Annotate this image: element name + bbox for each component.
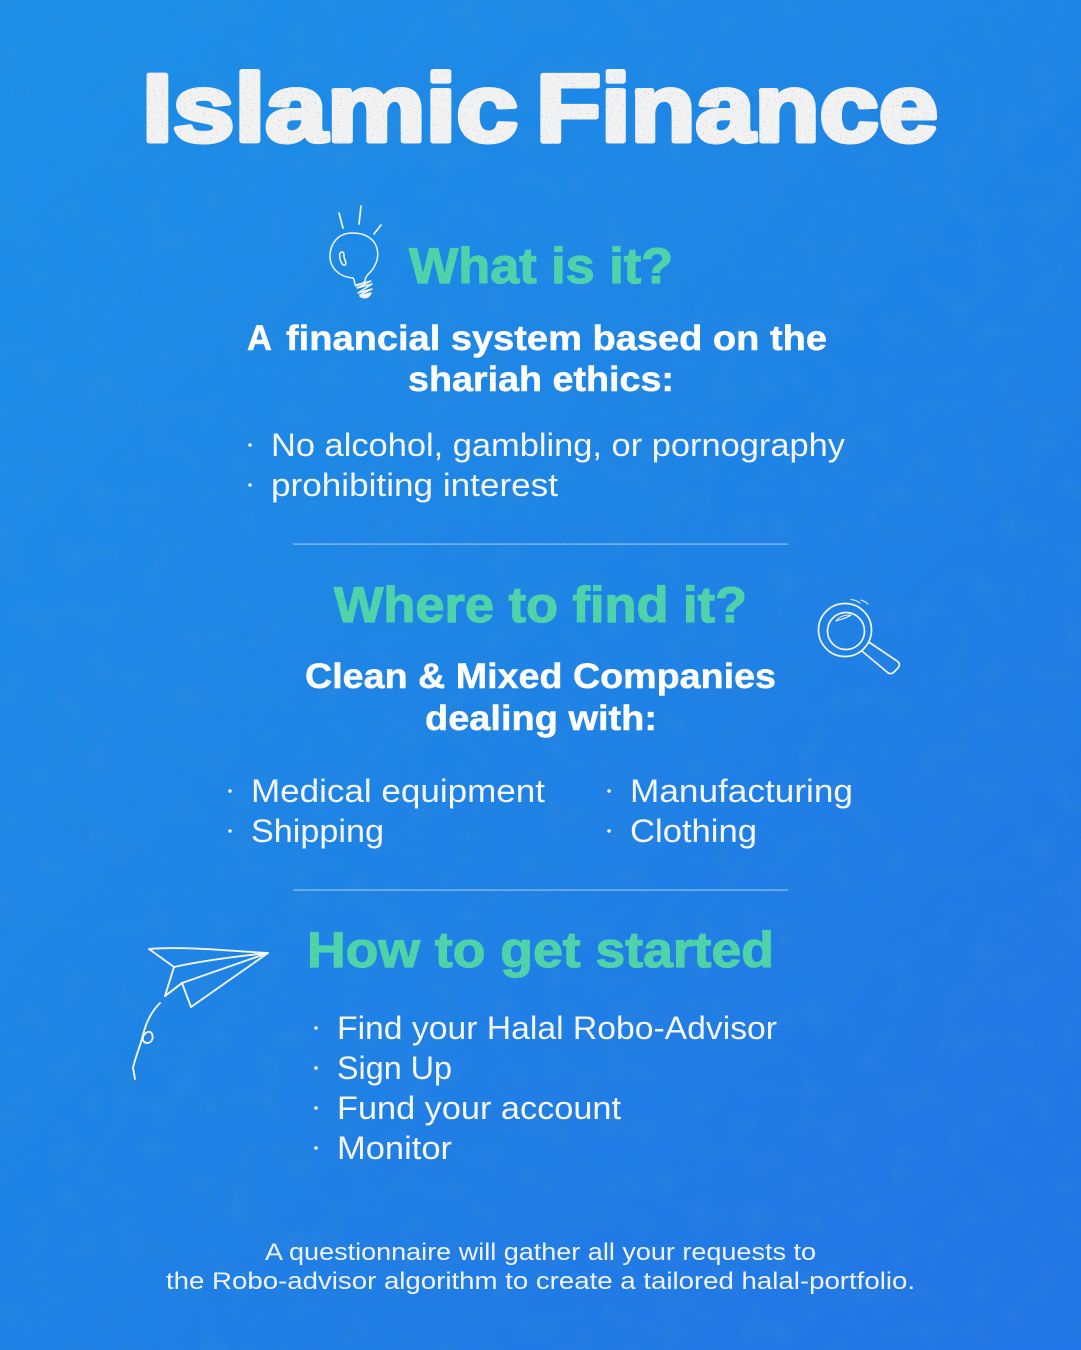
subheading: clean and mixed companies: Clean & Mixed Companies (305, 657, 776, 696)
footer note: A questionnaire will gather all your requests to (265, 1239, 816, 1266)
list: shariah rules (248, 427, 845, 503)
subheading: financial system: shariah ethics: (408, 360, 674, 399)
heading: How to get started: How to get started (307, 922, 774, 978)
list: shariah rules: prohibiting interest (271, 467, 558, 503)
icon: paper plane (133, 948, 268, 1079)
list: industries right (607, 773, 853, 849)
list: steps (314, 1010, 777, 1166)
list: industries left: Medical equipment (251, 773, 545, 809)
subheading: financial system (247, 319, 827, 399)
list: industries left: Shipping (251, 813, 384, 849)
list: shariah rules: No alcohol, gambling, or pornography (271, 427, 845, 463)
subheading: clean and mixed companies (305, 657, 776, 738)
icon: magnifying glass (818, 600, 899, 674)
list: steps: Monitor (337, 1130, 452, 1166)
footer note (166, 1239, 915, 1295)
list: steps: Sign Up (337, 1050, 452, 1086)
title: Islamic (142, 55, 518, 162)
subheading: financial system: financial system based on the (286, 319, 827, 358)
list: industries left (228, 773, 545, 849)
list: steps: Fund your account (337, 1090, 621, 1126)
subheading: financial system: A (247, 319, 272, 358)
heading: What is it?: What is it? (409, 238, 673, 294)
list: steps: Find your Halal Robo-Advisor (337, 1010, 777, 1046)
icon: light bulb (330, 206, 381, 298)
subheading: clean and mixed companies: dealing with: (425, 699, 657, 738)
footer note: the Robo-advisor algorithm to create a tailored halal-portfolio. (166, 1268, 915, 1295)
title (142, 55, 938, 162)
list: industries right: Clothing (630, 813, 757, 849)
heading: Where to find it?: Where to find it? (334, 577, 747, 633)
title: Finance (536, 55, 938, 162)
list: industries right: Manufacturing (630, 773, 853, 809)
